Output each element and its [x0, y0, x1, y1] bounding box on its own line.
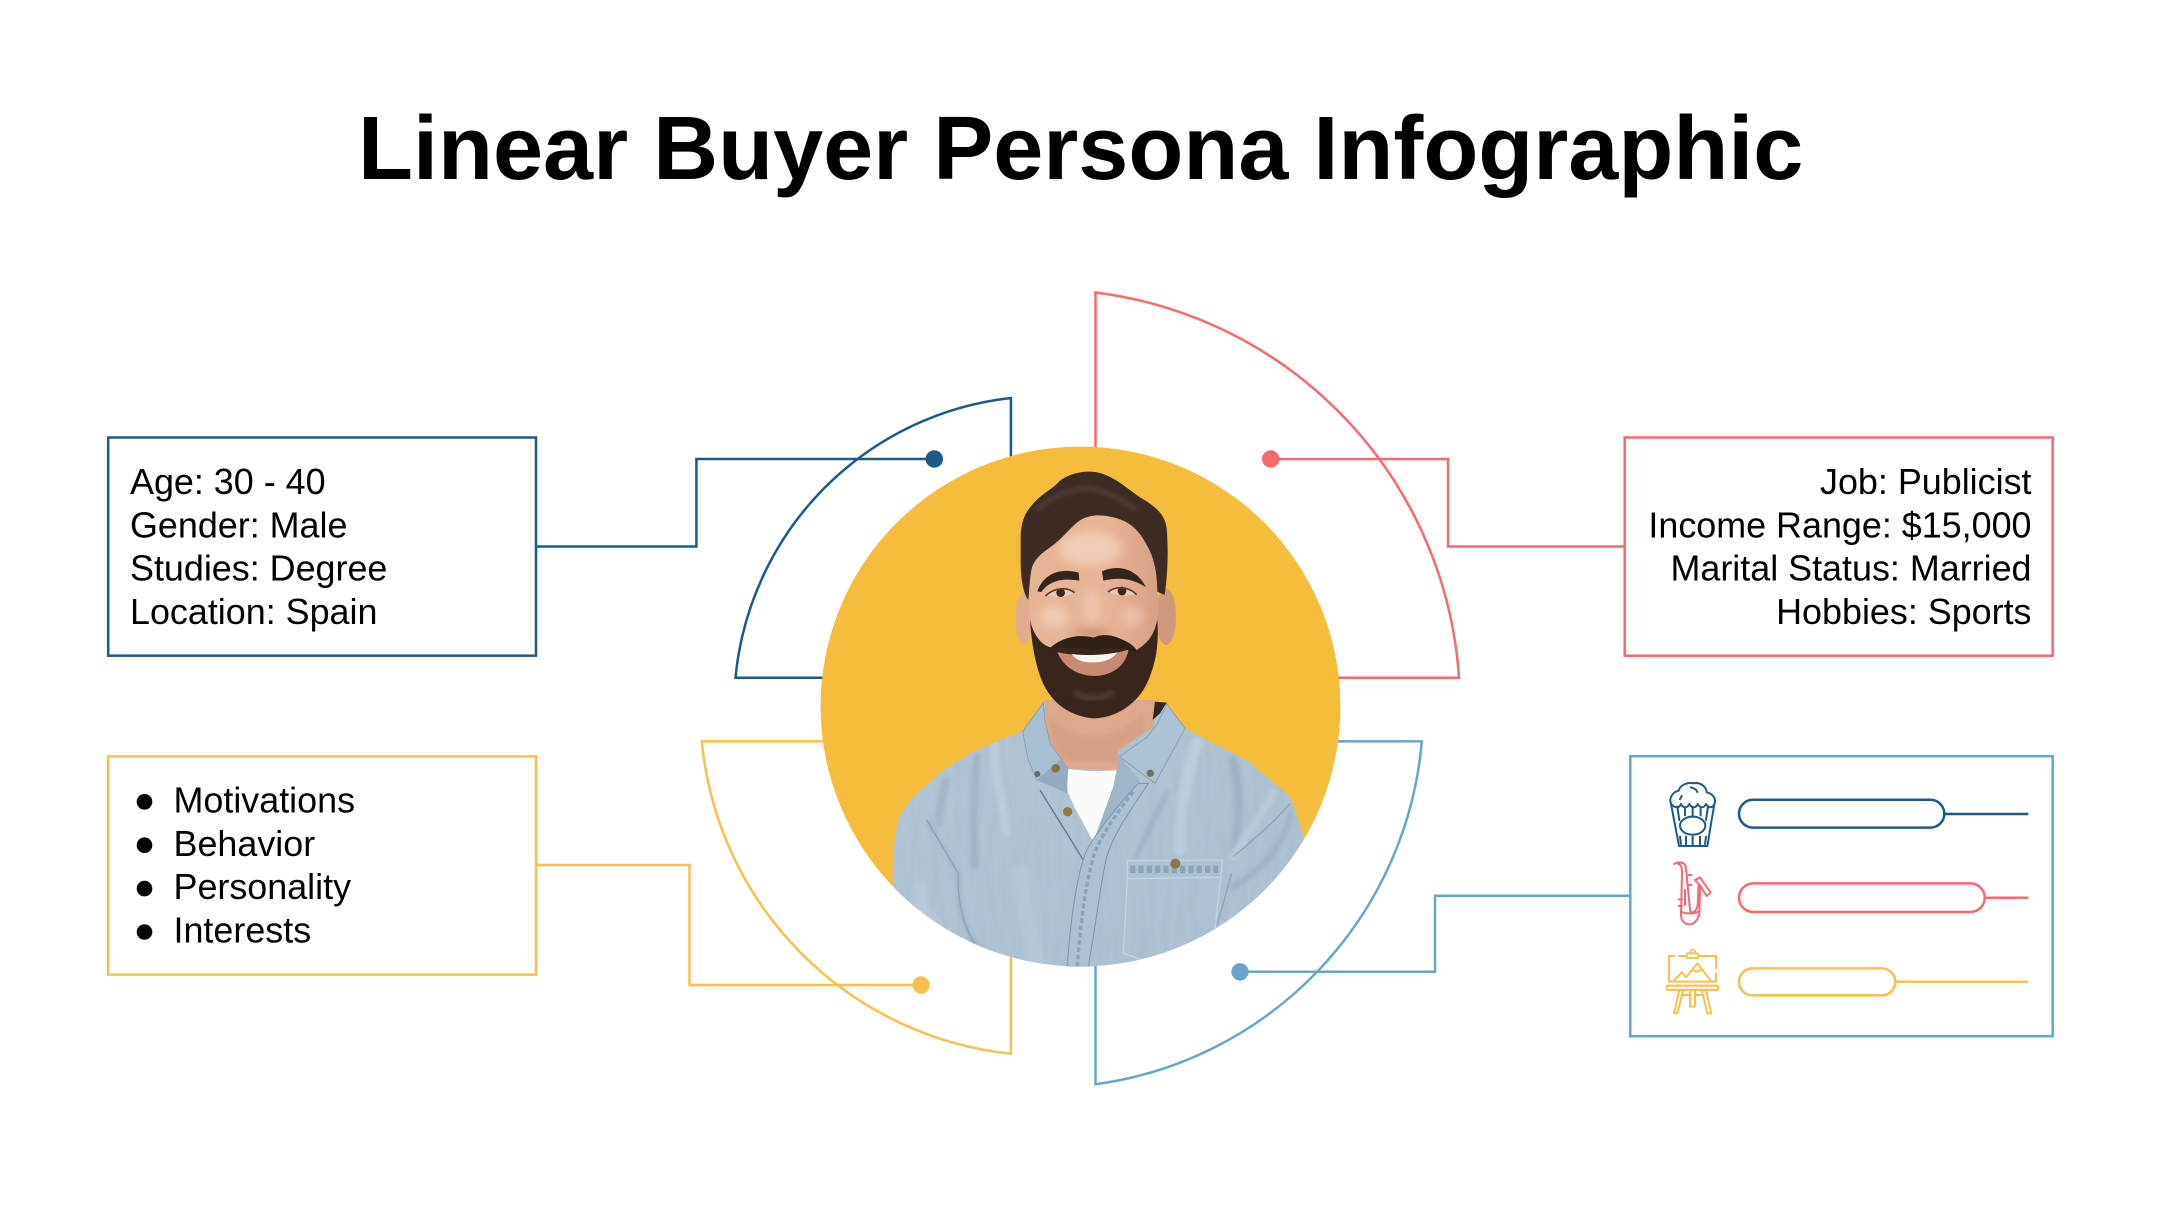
job details text: Marital Status: Married — [1670, 549, 2032, 589]
eyebrows — [1037, 571, 1079, 592]
job details text: Job: Publicist — [1820, 462, 2032, 502]
arc sector: light blue — [1096, 741, 1422, 1084]
undershirt — [1067, 769, 1117, 840]
sleeve seams — [927, 803, 1290, 947]
button placket — [1067, 783, 1148, 967]
icon: easel — [1667, 950, 1718, 1013]
neck — [1045, 700, 1155, 771]
icon: popcorn — [1670, 783, 1715, 846]
ears — [1016, 592, 1032, 644]
denim texture — [890, 700, 1310, 970]
connector: dark blue — [536, 450, 943, 546]
pocket — [1123, 860, 1223, 960]
beard — [1030, 619, 1158, 718]
left collar inner — [1037, 759, 1068, 793]
demographics text — [130, 462, 387, 632]
panel: job details — [1625, 438, 2053, 656]
bullet list: Personality — [174, 867, 351, 907]
dot: red — [1262, 450, 1279, 468]
demographics text: Gender: Male — [130, 505, 347, 545]
right collar — [1119, 704, 1185, 783]
bullet list: Motivations — [174, 781, 355, 821]
lower lip area — [1057, 649, 1129, 676]
demographics text: Studies: Degree — [130, 549, 387, 589]
shirt — [892, 700, 1304, 966]
demographics text: Location: Spain — [130, 592, 377, 632]
title: Linear Buyer Persona Infographic — [358, 99, 1803, 199]
dot: yellow — [912, 976, 930, 994]
job details text — [1648, 462, 2032, 632]
connector: light blue — [1231, 896, 1630, 980]
hair — [1021, 472, 1168, 600]
arc sector: red — [1096, 292, 1459, 678]
demographics text: Age: 30 - 40 — [130, 462, 326, 502]
dark collar inner — [1153, 702, 1167, 720]
left collar — [1023, 703, 1062, 781]
teeth — [1072, 652, 1117, 662]
dot: light blue — [1231, 963, 1249, 980]
dot: dark blue — [926, 450, 943, 468]
portrait background — [820, 446, 1340, 966]
portrait photo — [820, 446, 1347, 1000]
face highlights — [1039, 532, 1144, 637]
connector: yellow — [536, 865, 930, 994]
connector: red — [1262, 450, 1625, 546]
inner placket — [1096, 757, 1140, 835]
eyes — [1047, 589, 1073, 597]
job details text: Hobbies: Sports — [1776, 592, 2032, 632]
shirt folds — [920, 743, 1290, 963]
mustache — [1049, 635, 1137, 653]
panel: interests — [1630, 756, 2053, 1036]
shirt buttons — [1051, 764, 1060, 773]
panel: psychographics list — [108, 756, 536, 975]
bullet list: Interests — [174, 910, 311, 950]
bar: saxophone level — [1739, 883, 2028, 912]
arc sector: yellow — [702, 741, 1011, 1054]
bar: popcorn level — [1739, 800, 2028, 828]
arc sector: dark blue — [736, 398, 1011, 678]
face — [1030, 515, 1158, 688]
panel: demographics — [108, 438, 536, 656]
head — [1016, 472, 1176, 718]
job details text: Income Range: $15,000 — [1648, 505, 2032, 545]
icon: saxophone — [1674, 862, 1711, 924]
bullet list: Behavior — [174, 824, 315, 864]
bar: easel level — [1739, 968, 2028, 995]
bullet list — [137, 781, 355, 950]
